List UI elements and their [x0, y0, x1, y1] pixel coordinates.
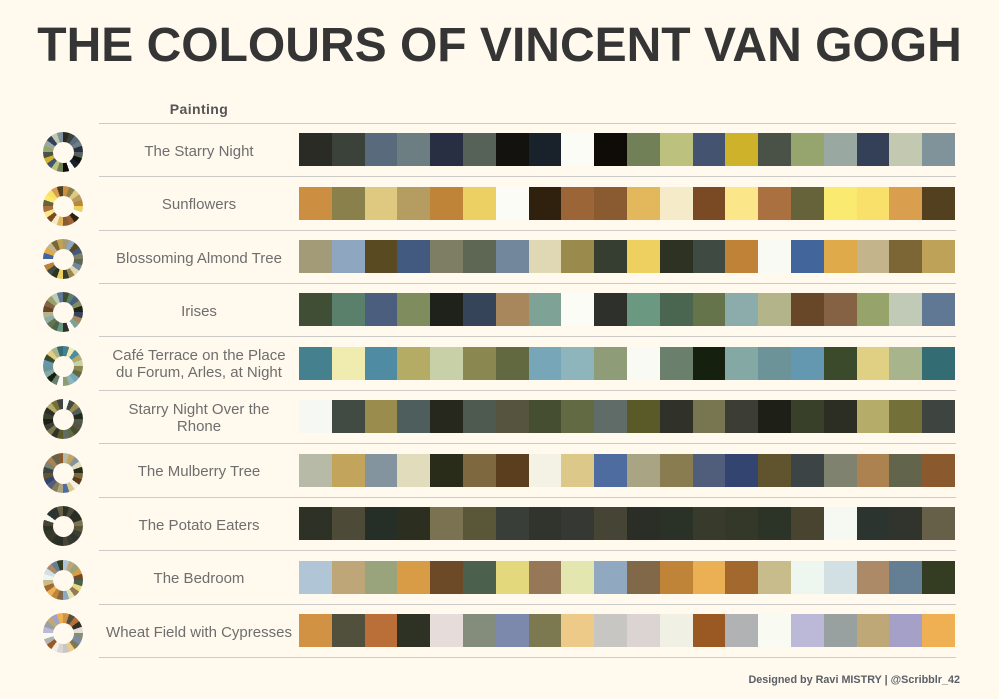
- palette: The Bedroom: [299, 561, 955, 594]
- column heading: Painting: Painting: [170, 101, 228, 117]
- label: Café Terrace: Café Terrace on the Place: [112, 346, 286, 364]
- donut: The Potato Eaters: [43, 506, 83, 546]
- donut: Sunflowers: [43, 186, 83, 226]
- row: The Potato Eaters: [43, 506, 955, 546]
- label: The Mulberry Tree: The Mulberry Tree: [138, 463, 260, 480]
- row: Sunflowers: [43, 186, 955, 226]
- palette: The Potato Eaters: [299, 507, 955, 540]
- label: Starry Night Over the Rhone: [129, 400, 269, 434]
- palette: Irises: [299, 293, 955, 326]
- title: THE COLOURS OF VINCENT VAN GOGH: [37, 19, 962, 72]
- label: Sunflowers: Sunflowers: [162, 196, 236, 213]
- row: Starry Night Over the Rhone: [43, 399, 955, 439]
- donut: Café Terrace: [43, 346, 83, 386]
- donut: The Mulberry Tree: [43, 453, 83, 493]
- credit line: Designed by Ravi MISTRY | @Scribblr_42: [748, 674, 960, 686]
- palette: Sunflowers: [299, 187, 955, 220]
- label: Café Terrace: du Forum, Arles, at Night: [116, 364, 282, 380]
- label: Starry Night Over the Rhone: Starry Night Over the: [129, 400, 269, 418]
- row: Blossoming Almond Tree: [43, 239, 955, 279]
- label: Starry Night Over the Rhone: Rhone: [177, 418, 221, 434]
- label: The Potato Eaters: The Potato Eaters: [139, 517, 259, 534]
- label: Irises: Irises: [181, 303, 217, 320]
- palette: Café Terrace: [299, 347, 955, 380]
- row: Wheat Field with Cypresses: [43, 613, 955, 653]
- donut: Blossoming Almond Tree: [43, 239, 83, 279]
- donut: The Starry Night: [43, 132, 83, 172]
- palette: The Starry Night: [299, 133, 955, 166]
- label: Café Terrace: [112, 346, 286, 380]
- row: The Bedroom: [43, 560, 955, 600]
- donut: Wheat Field with Cypresses: [43, 613, 83, 653]
- row: The Starry Night: [43, 132, 955, 172]
- palette: Blossoming Almond Tree: [299, 240, 955, 273]
- palette: The Mulberry Tree: [299, 454, 955, 487]
- donut: Irises: [43, 292, 83, 332]
- label: The Starry Night: The Starry Night: [144, 143, 254, 160]
- palette: Starry Night Over the Rhone: [299, 400, 955, 433]
- row: Café Terrace on the Place du Forum, Arles, at Night: [43, 346, 955, 386]
- label: Wheat Field with Cypresses: Wheat Field with Cypresses: [106, 624, 292, 641]
- row: The Mulberry Tree: [43, 453, 955, 493]
- palette: Wheat Field with Cypresses: [299, 614, 955, 647]
- donut: Starry Night Over the Rhone: [43, 399, 83, 439]
- label: The Bedroom: The Bedroom: [154, 570, 244, 587]
- label: Blossoming Almond Tree: Blossoming Almond Tree: [116, 250, 282, 267]
- donut: The Bedroom: [43, 560, 83, 600]
- row: Irises: [43, 292, 955, 332]
